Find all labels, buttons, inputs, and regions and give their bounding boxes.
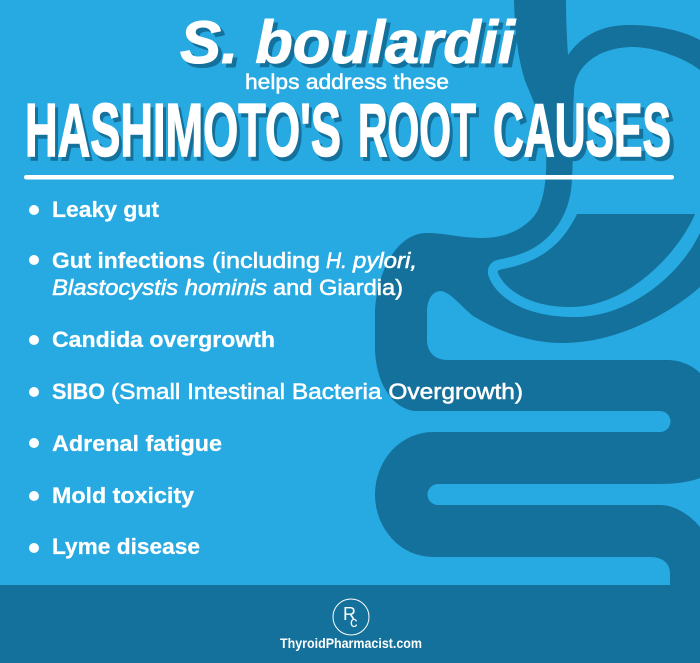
- item: gut infections: pylori,: [352, 248, 417, 273]
- esophagus, stomach wall and intestines: [375, 0, 700, 585]
- item: gut infections: H.: [326, 248, 347, 273]
- item: adrenal fatigue: Adrenal fatigue: [52, 431, 222, 456]
- item: gut infections: [29, 248, 417, 300]
- item: lyme disease: Lyme disease: [52, 534, 200, 559]
- stomach lumen: [488, 47, 700, 317]
- list of root causes: [29, 197, 523, 559]
- footer band: [0, 585, 700, 663]
- heading: Hashimoto's root causes: ROOT: [361, 92, 479, 176]
- heading: Hashimoto's root causes: ROOT: [358, 88, 476, 172]
- heading: Hashimoto's root causes: HASHIMOTO'S: [25, 88, 341, 172]
- item: SIBO: SIBO: [52, 379, 105, 404]
- item: leaky gut: Leaky gut: [52, 197, 160, 222]
- item: gut infections: (including: [212, 248, 320, 273]
- heading: S. boulardii: S. boulardii: [180, 9, 516, 76]
- item: gut infections: Blastocystis hominis: [52, 275, 267, 300]
- heading: S. boulardii: S. boulardii: [184, 13, 520, 80]
- item: gut infections: Gut infections: [52, 248, 205, 273]
- heading rule: [24, 175, 674, 180]
- item: SIBO: (Small Intestinal Bacteria Overgrowth): [111, 379, 523, 404]
- logo: PC monogram: [333, 599, 369, 635]
- item: candida overgrowth: Candida overgrowth: [52, 327, 275, 352]
- item: mold toxicity: Mold toxicity: [52, 483, 195, 508]
- logo: PC monogram: c: [350, 614, 358, 631]
- logo: PC monogram: R: [343, 604, 356, 624]
- website: ThyroidPharmacist.com: [280, 635, 422, 651]
- illustration: digestive tract: [375, 0, 700, 585]
- subheading: helps address these: [245, 71, 449, 94]
- stomach contents: [498, 214, 695, 307]
- heading: Hashimoto's root causes: HASHIMOTO'S: [28, 92, 344, 176]
- item: gut infections: and Giardia): [273, 275, 403, 300]
